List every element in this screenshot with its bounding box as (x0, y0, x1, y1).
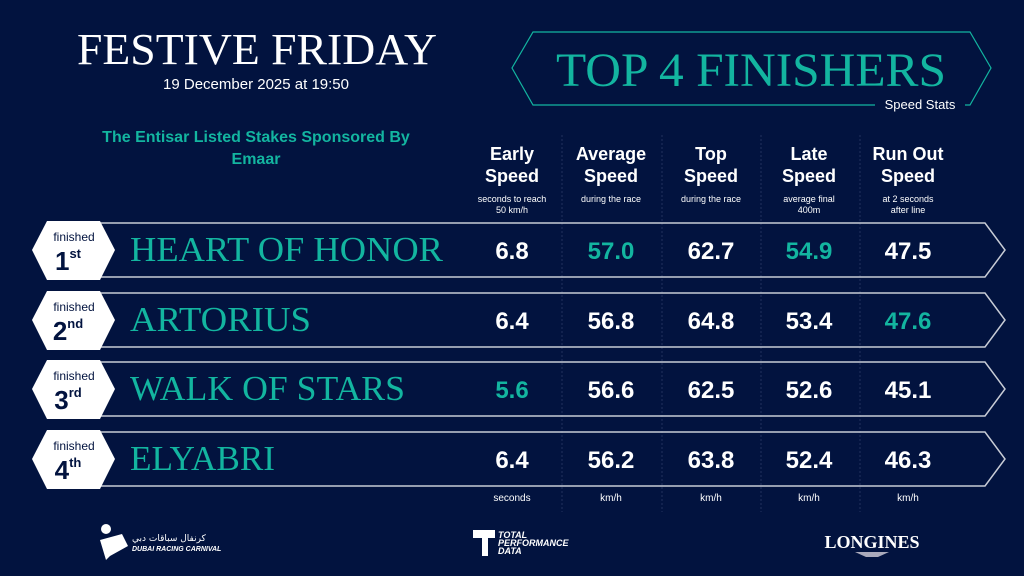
column headers: Speed (782, 166, 836, 186)
logo: dubai racing carnival: كرنفال سباقات دبي (132, 534, 207, 544)
race name: The Entisar Listed Stakes Sponsored By (102, 129, 410, 146)
row 4: finished (53, 439, 95, 453)
column headers: Speed (881, 166, 935, 186)
row 1: 62.7 (688, 238, 734, 265)
row 4: 46.3 (885, 447, 931, 474)
logo: total performance data: DATA (498, 546, 522, 556)
units: km/h (600, 493, 622, 504)
units: km/h (897, 493, 919, 504)
row 4: 56.2 (588, 447, 634, 474)
row 4: 63.8 (688, 447, 734, 474)
column headers: Early (490, 144, 534, 164)
row 3: WALK OF STARS (130, 369, 405, 408)
column headers: Average (576, 144, 646, 164)
row 1: finished (53, 230, 95, 244)
units: seconds (493, 493, 531, 504)
column headers: 50 km/h (496, 205, 528, 215)
row 1: 6.8 (495, 238, 529, 265)
column headers: Speed (684, 166, 738, 186)
title: FESTIVE FRIDAY (77, 25, 437, 74)
logo: total performance data (473, 530, 569, 556)
logo: dubai racing carnival (100, 524, 221, 560)
row 3: 5.6 (495, 377, 529, 404)
column headers: at 2 seconds (882, 194, 934, 204)
column headers: Run Out (873, 144, 943, 164)
column dividers (562, 135, 860, 512)
row 1: 1 (55, 246, 69, 276)
top 4 finishers banner: TOP 4 FINISHERS (556, 44, 946, 97)
row 2: finished (53, 300, 95, 314)
logo: longines: LONGINES (824, 532, 920, 552)
column headers: Speed (485, 166, 539, 186)
column headers: after line (891, 205, 925, 215)
column headers: during the race (681, 194, 741, 204)
row 2 (32, 291, 1005, 350)
logo: total performance data: PERFORMANCE (498, 538, 569, 548)
column headers (478, 144, 943, 215)
row 4: 52.4 (786, 447, 833, 474)
row 1: 57.0 (588, 238, 634, 265)
row 3: 3 (54, 385, 69, 415)
row 2: 53.4 (786, 308, 833, 335)
row 4: 6.4 (495, 447, 529, 474)
units (493, 493, 919, 504)
row 2: nd (67, 316, 83, 331)
row 1 (32, 221, 1005, 280)
row 2: 47.6 (885, 308, 931, 335)
logo: total performance data: TOTAL (498, 530, 527, 540)
row 2: 6.4 (495, 308, 529, 335)
row 1: HEART OF HONOR (130, 230, 444, 269)
units: km/h (798, 493, 820, 504)
date: 19 December 2025 at 19:50 (163, 76, 349, 93)
row 1: 54.9 (786, 238, 832, 265)
column headers: 400m (798, 205, 820, 215)
row 2: ARTORIUS (130, 300, 311, 339)
column headers: Late (790, 144, 828, 164)
row 3 (32, 360, 1005, 419)
column headers: during the race (581, 194, 641, 204)
row 3: 45.1 (885, 377, 931, 404)
row 4: ELYABRI (130, 439, 275, 478)
row 2: 56.8 (588, 308, 634, 335)
row 4 (32, 430, 1005, 489)
row 1: st (69, 246, 82, 261)
race name: Emaar (232, 151, 280, 168)
row 2: 2 (53, 316, 67, 346)
top 4 finishers banner (512, 32, 991, 112)
row 3: 62.5 (688, 377, 734, 404)
column headers: Top (695, 144, 727, 164)
column headers: seconds to reach (478, 194, 546, 204)
row 3: finished (53, 369, 95, 383)
row 3: 52.6 (786, 377, 832, 404)
top 4 finishers banner: Speed Stats (885, 97, 956, 112)
column headers: average final (783, 194, 835, 204)
column headers: Speed (584, 166, 638, 186)
row 3: rd (69, 385, 82, 400)
units: km/h (700, 493, 722, 504)
row 4: th (69, 455, 81, 470)
row 1: 47.5 (885, 238, 931, 265)
logo: dubai racing carnival: DUBAI RACING CARNIVAL (132, 546, 221, 553)
row 4: 4 (55, 455, 69, 485)
row 3: 56.6 (588, 377, 634, 404)
row 2: 64.8 (688, 308, 734, 335)
race name (102, 129, 410, 168)
